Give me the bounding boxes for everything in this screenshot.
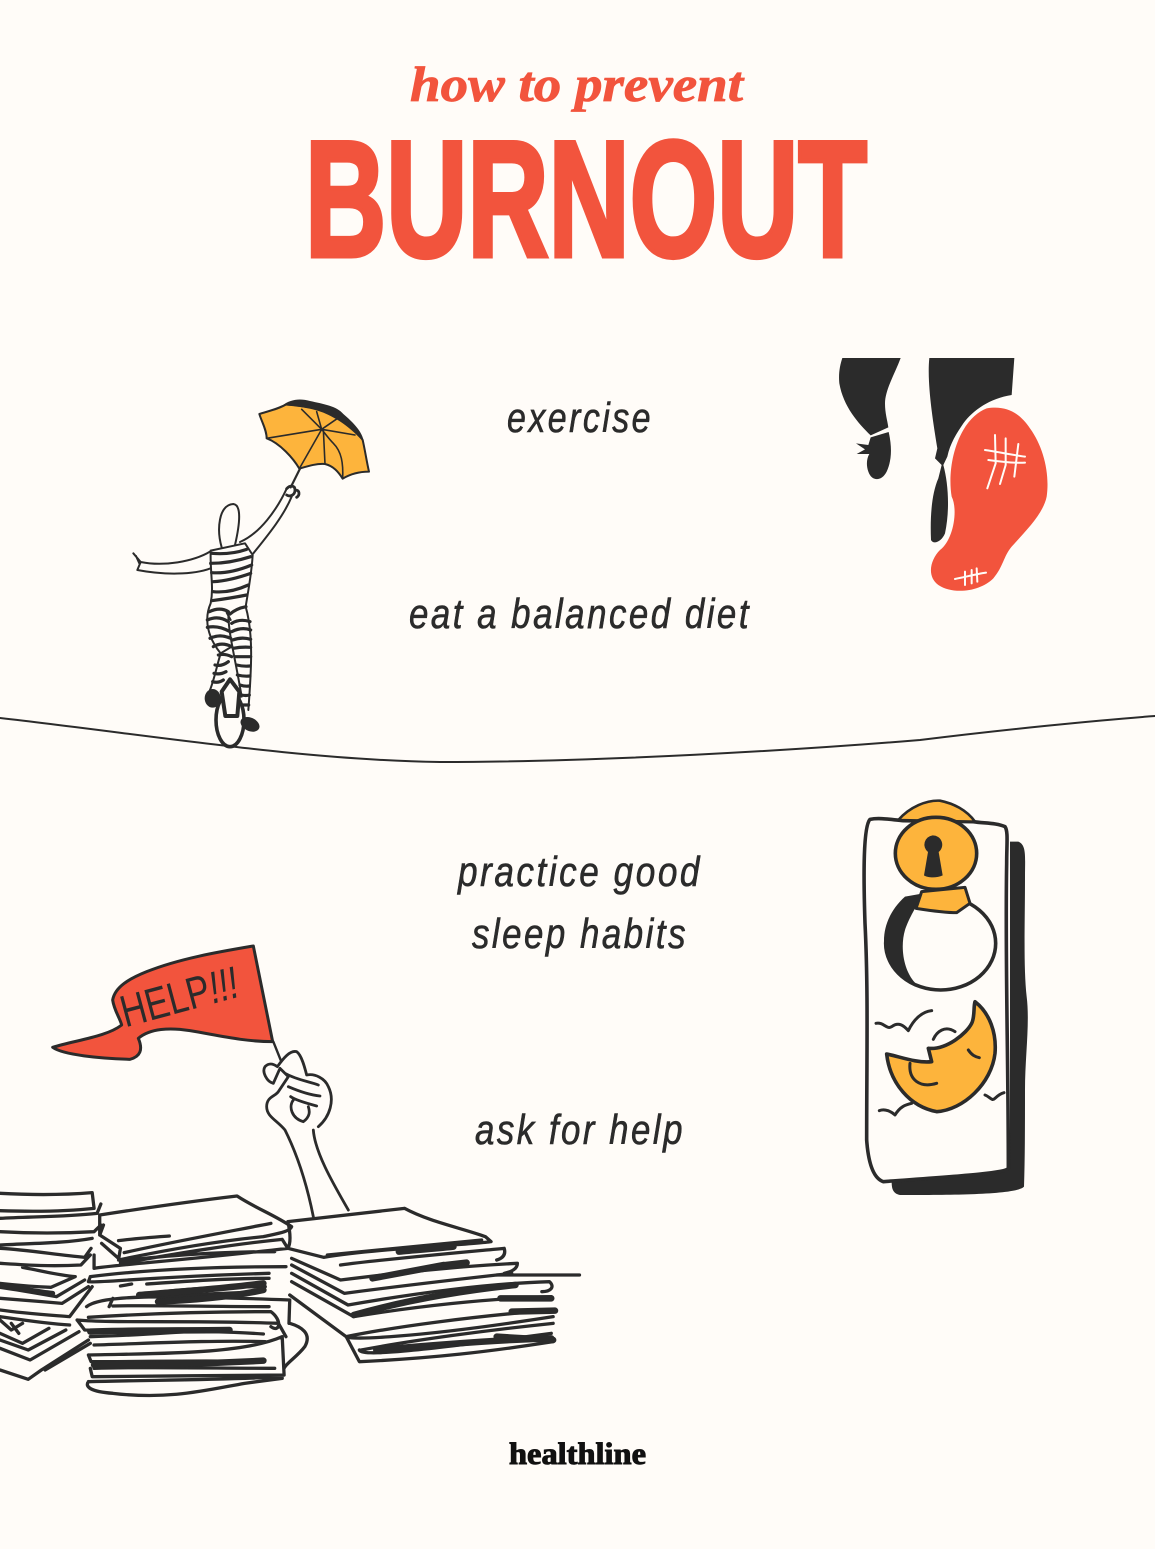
- desk line: [497, 1273, 579, 1277]
- figure: striped suit: [207, 543, 253, 710]
- paper stack: right: [288, 1208, 555, 1362]
- paper stack: middle: [77, 1196, 307, 1396]
- left leg and foot: [839, 358, 901, 479]
- tightrope: [0, 716, 1155, 762]
- icon: keyhole: [924, 835, 943, 877]
- icon: umbrella: [259, 399, 369, 487]
- illustration: door hanger with moon: [864, 801, 1028, 1195]
- figure: raised arm, head, outstretched arm: [133, 486, 299, 574]
- subtitle: how to prevent: how to prevent: [410, 56, 745, 112]
- hand and arm: [264, 1051, 348, 1217]
- hanger shadow: [892, 842, 1028, 1195]
- tip: practice good sleep habits: sleep habits: [472, 910, 688, 957]
- tip: exercise: exercise: [507, 394, 653, 441]
- tip: eat a balanced diet: eat a balanced diet: [409, 590, 751, 637]
- tip: ask for help: ask for help: [475, 1106, 685, 1153]
- illustration: stacks of paper: [0, 1193, 579, 1396]
- flag pole: [273, 1042, 281, 1060]
- hanger card: [864, 819, 1008, 1182]
- tip: practice good sleep habits: practice good: [456, 848, 702, 895]
- tip: practice good sleep habits: [456, 848, 702, 957]
- door hole and knob: [884, 801, 996, 990]
- illustration: hand waving help flag: [53, 946, 348, 1217]
- title: BURNOUT: BURNOUT: [305, 107, 867, 291]
- logo: healthline: healthline: [509, 1436, 646, 1471]
- paper stack: left: [0, 1193, 101, 1379]
- illustration: feet with red sole: [839, 358, 1048, 591]
- right leg and foot: [929, 358, 1014, 542]
- illustration: unicyclist with umbrella: [133, 399, 369, 747]
- flag: [53, 946, 273, 1059]
- unicycle and shoes: [205, 679, 262, 747]
- flag: HELP!!!: [115, 957, 244, 1037]
- red shoe sole: [931, 408, 1048, 591]
- icon: sleeping moon with clouds: [876, 1002, 1004, 1115]
